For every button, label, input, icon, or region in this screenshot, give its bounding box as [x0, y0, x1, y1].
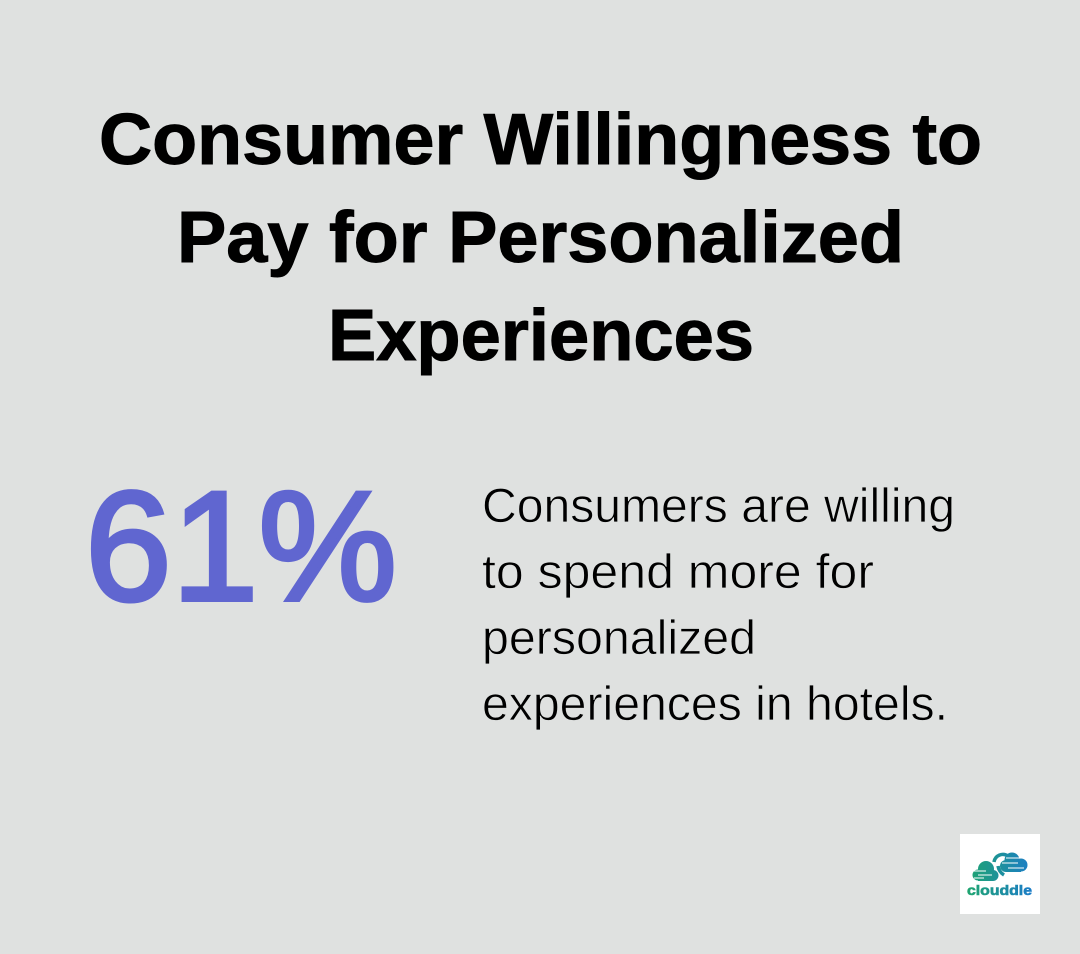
icon: blue cloud	[1000, 852, 1028, 872]
title: Pay for Personalized	[177, 198, 904, 278]
description text: to spend more for	[482, 546, 874, 599]
title: Experiences	[328, 296, 754, 376]
description text: personalized	[482, 612, 756, 665]
title: Consumer Willingness to	[99, 100, 982, 180]
description text: Consumers are willing	[482, 480, 955, 533]
description text: experiences in hotels.	[482, 678, 948, 731]
icon: cloud stripes	[974, 858, 1024, 878]
big statistic: 61%: 61%	[85, 460, 397, 634]
icon: middle cloud arc	[994, 854, 1008, 875]
logo: clouddle	[960, 834, 1040, 914]
logo wordmark: clouddle	[967, 882, 1032, 898]
icon: green cloud	[972, 861, 998, 881]
description text	[482, 480, 955, 731]
title	[99, 100, 982, 376]
